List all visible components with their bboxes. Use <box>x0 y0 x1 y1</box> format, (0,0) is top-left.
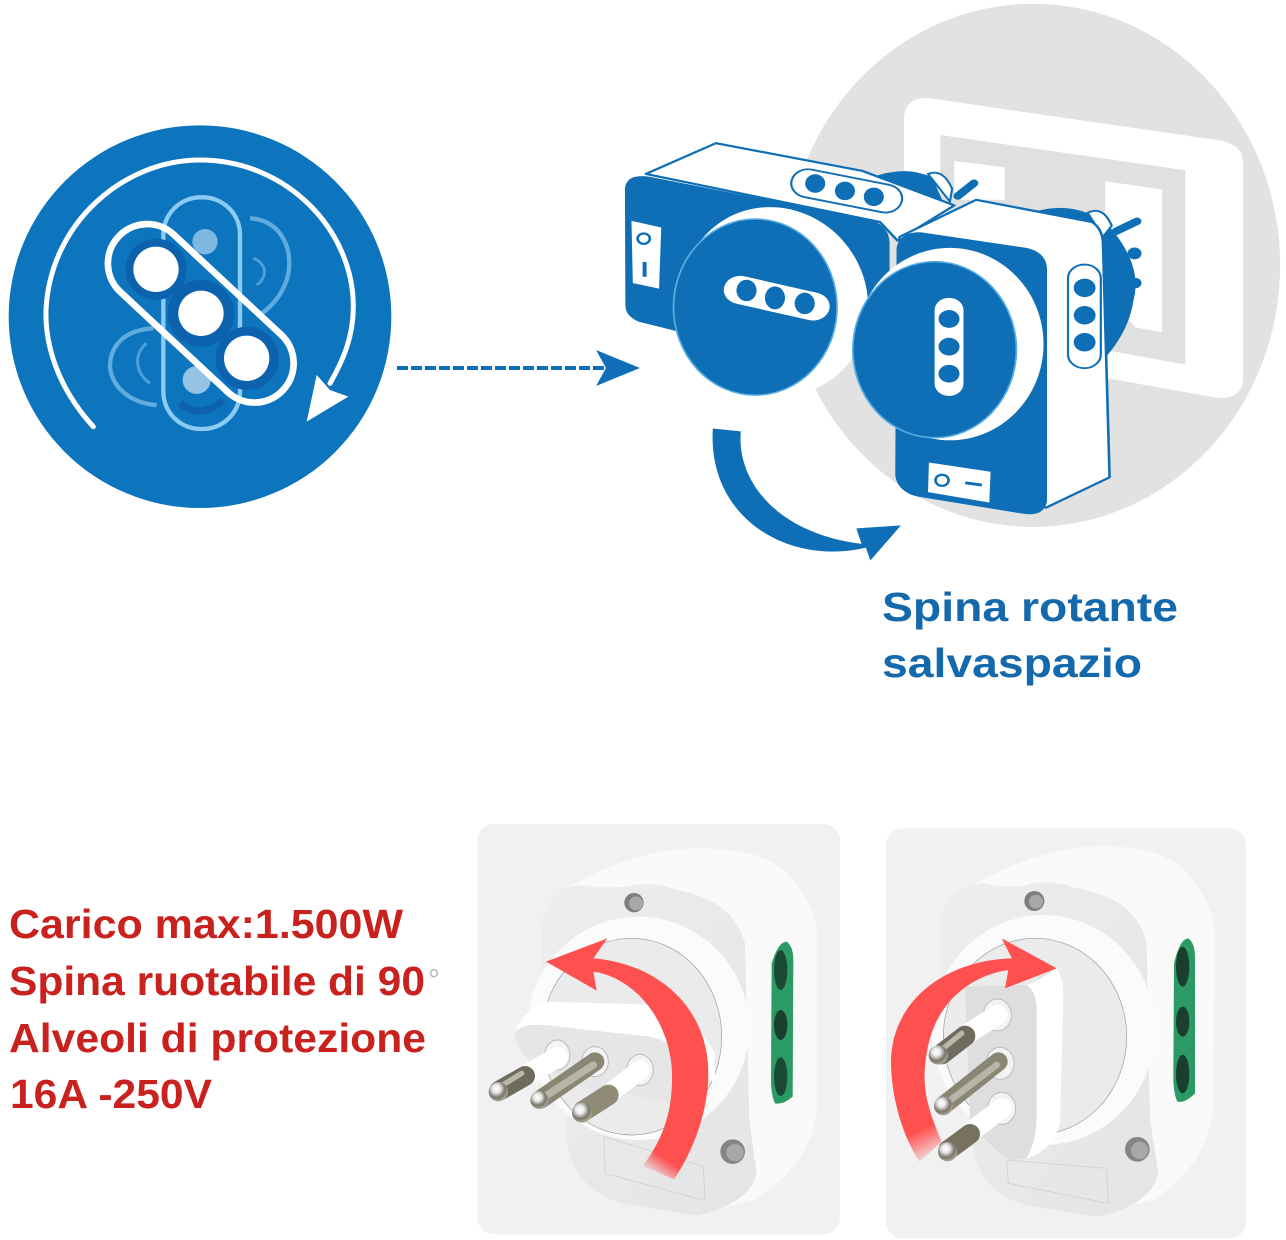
disc slot <box>720 273 833 324</box>
grey background circle <box>786 4 1280 527</box>
photo panel 1: horizontal plug <box>477 824 840 1234</box>
blue rotation badge <box>9 125 391 508</box>
plug head <box>965 967 1063 1160</box>
adapter body <box>528 848 817 1216</box>
switch <box>631 221 661 289</box>
left plug, switch position 1 <box>625 143 974 406</box>
green side socket <box>771 942 793 1104</box>
ghost positions of the socket <box>110 197 289 429</box>
circular rotation arrow <box>46 160 353 427</box>
photo panel 2: vertical plug <box>886 828 1246 1238</box>
caption: spina rotante salvaspazio: Spina rotante <box>882 584 1178 630</box>
red specifications text: Spina ruotabile di 90 <box>9 958 425 1004</box>
plug pins <box>489 1040 653 1123</box>
red rotation arrow <box>546 938 708 1179</box>
curved rotation arrow <box>713 428 901 561</box>
caption: spina rotante salvaspazio <box>882 584 1178 686</box>
red specifications text: 16A -250V <box>10 1071 213 1117</box>
red specifications text <box>9 901 440 1117</box>
red rotation arrow <box>891 938 1057 1162</box>
white collar <box>856 248 1044 440</box>
red specifications text: Alveoli di protezione <box>9 1015 426 1061</box>
wall plate <box>904 98 1243 398</box>
side socket <box>1068 265 1101 368</box>
white collar <box>668 197 882 406</box>
disc slot <box>935 298 963 396</box>
rotating disc <box>853 262 1016 438</box>
caption: spina rotante salvaspazio: salvaspazio <box>882 640 1142 686</box>
dashed arrow <box>397 350 640 386</box>
switch <box>928 462 991 502</box>
red specifications text: ° <box>428 964 440 997</box>
red specifications text: Carico max:1.500W <box>9 901 403 947</box>
plug head <box>515 1002 715 1103</box>
rotated socket slot <box>92 208 310 419</box>
rotating disc <box>673 219 837 395</box>
adapter body <box>932 846 1215 1217</box>
green side socket <box>1173 938 1195 1102</box>
plug pins <box>929 999 1016 1161</box>
right plug, switch position 2 <box>853 200 1142 514</box>
top socket <box>788 166 905 215</box>
rotating plug illustration <box>625 4 1280 561</box>
